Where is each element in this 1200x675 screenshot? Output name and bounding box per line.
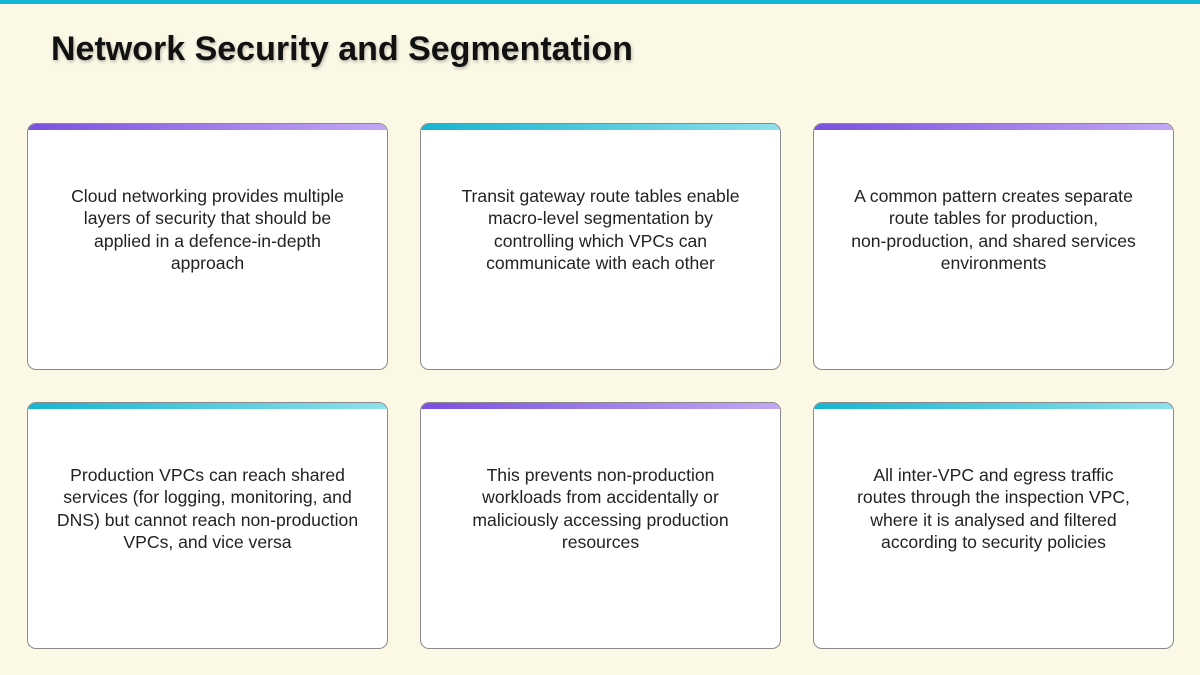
text 4 (57, 465, 358, 552)
text 1 (71, 186, 344, 273)
text 3 (851, 186, 1136, 273)
text 3: route tables for production, (889, 208, 1098, 228)
text 6: where it is analysed and filtered (870, 510, 1117, 530)
text 3: A common pattern creates separate (854, 186, 1133, 206)
text 4: Production VPCs can reach shared (70, 465, 345, 485)
text 6: routes through the inspection VPC, (857, 487, 1130, 507)
text 2: controlling which VPCs can (494, 231, 707, 251)
text 3: environments (941, 253, 1046, 273)
card 1 (27, 123, 388, 370)
text 2 (461, 186, 740, 273)
card 5 (420, 402, 781, 649)
text 4: DNS) but cannot reach non-production (57, 510, 358, 530)
text 1: applied in a defence-in-depth (94, 231, 321, 251)
text 1: approach (171, 253, 244, 273)
text 4: VPCs, and vice versa (123, 532, 292, 552)
text 2: communicate with each other (486, 253, 715, 273)
text 6: according to security policies (881, 532, 1106, 552)
text 3: non-production, and shared services (851, 231, 1136, 251)
text 1: Cloud networking provides multiple (71, 186, 344, 206)
card 2 (420, 123, 781, 370)
text 6: All inter-VPC and egress traffic (873, 465, 1114, 485)
text 1: layers of security that should be (84, 208, 331, 228)
text 6 (857, 465, 1130, 552)
card 4 (27, 402, 388, 649)
title: Network Security and Segmentation (51, 30, 633, 68)
text 2: macro-level segmentation by (488, 208, 713, 228)
text 2: Transit gateway route tables enable (461, 186, 740, 206)
text 4: services (for logging, monitoring, and (63, 487, 352, 507)
text 5: maliciously accessing production (472, 510, 729, 530)
text 5: workloads from accidentally or (482, 487, 719, 507)
card 3 (813, 123, 1174, 370)
text 5 (472, 465, 729, 552)
text 5: This prevents non-production (487, 465, 714, 485)
text 5: resources (562, 532, 639, 552)
card 6 (813, 402, 1174, 649)
